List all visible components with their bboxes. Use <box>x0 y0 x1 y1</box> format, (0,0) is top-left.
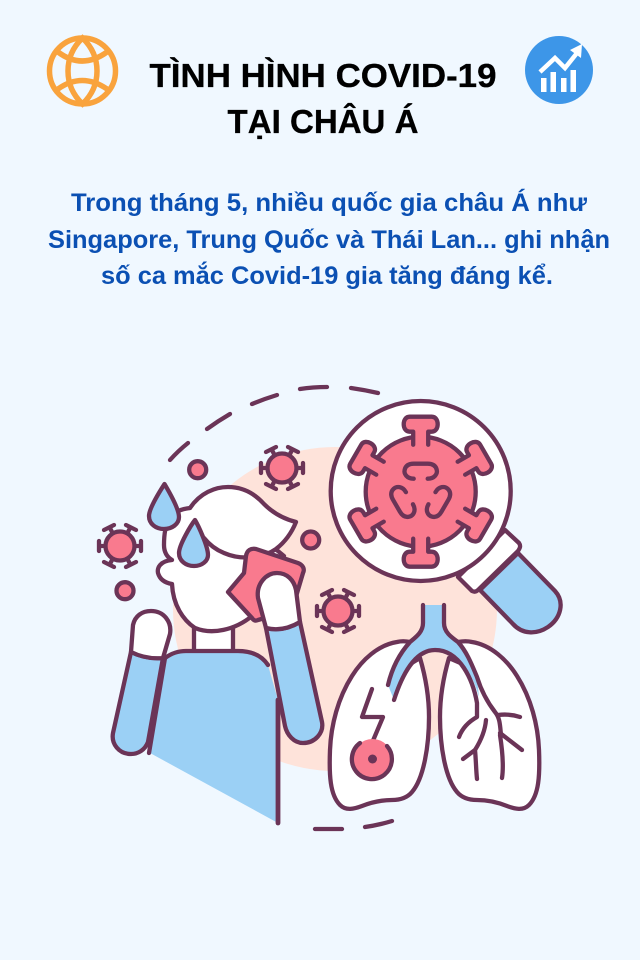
handle <box>480 553 561 632</box>
head <box>158 508 284 631</box>
trachea and bronchi lines <box>362 605 522 779</box>
trachea fill <box>388 605 479 700</box>
sweat drops <box>149 484 179 529</box>
infection spot <box>352 739 392 779</box>
title <box>150 57 496 140</box>
left arm <box>113 652 163 754</box>
intro text <box>48 188 610 290</box>
left lung <box>330 641 429 809</box>
collar <box>458 530 520 592</box>
intro text: số ca mắc Covid-19 gia tăng đáng kể. <box>101 260 553 290</box>
right lung <box>440 641 539 809</box>
person <box>113 484 322 823</box>
intro text: Trong tháng 5, nhiều quốc gia châu Á như <box>71 188 588 217</box>
lungs <box>330 605 539 809</box>
neck <box>194 625 233 655</box>
magnifying glass <box>331 401 561 632</box>
intro text: Singapore, Trung Quốc và Thái Lan... ghi nhận <box>48 226 610 254</box>
illustration <box>99 387 561 829</box>
tissue <box>228 549 304 621</box>
lightning crack <box>362 689 383 743</box>
icon: globe <box>50 38 116 104</box>
large virus <box>347 417 494 567</box>
hair <box>190 487 296 558</box>
peach background blob <box>173 447 497 771</box>
icon: rising chart <box>525 36 593 104</box>
torso <box>150 651 278 823</box>
title: TẠI CHÂU Á <box>228 103 418 140</box>
small virus particles <box>99 447 359 632</box>
dashed orbit <box>170 387 392 829</box>
title: TÌNH HÌNH COVID-19 <box>150 57 496 94</box>
right arm <box>266 622 322 743</box>
lens <box>331 401 511 581</box>
